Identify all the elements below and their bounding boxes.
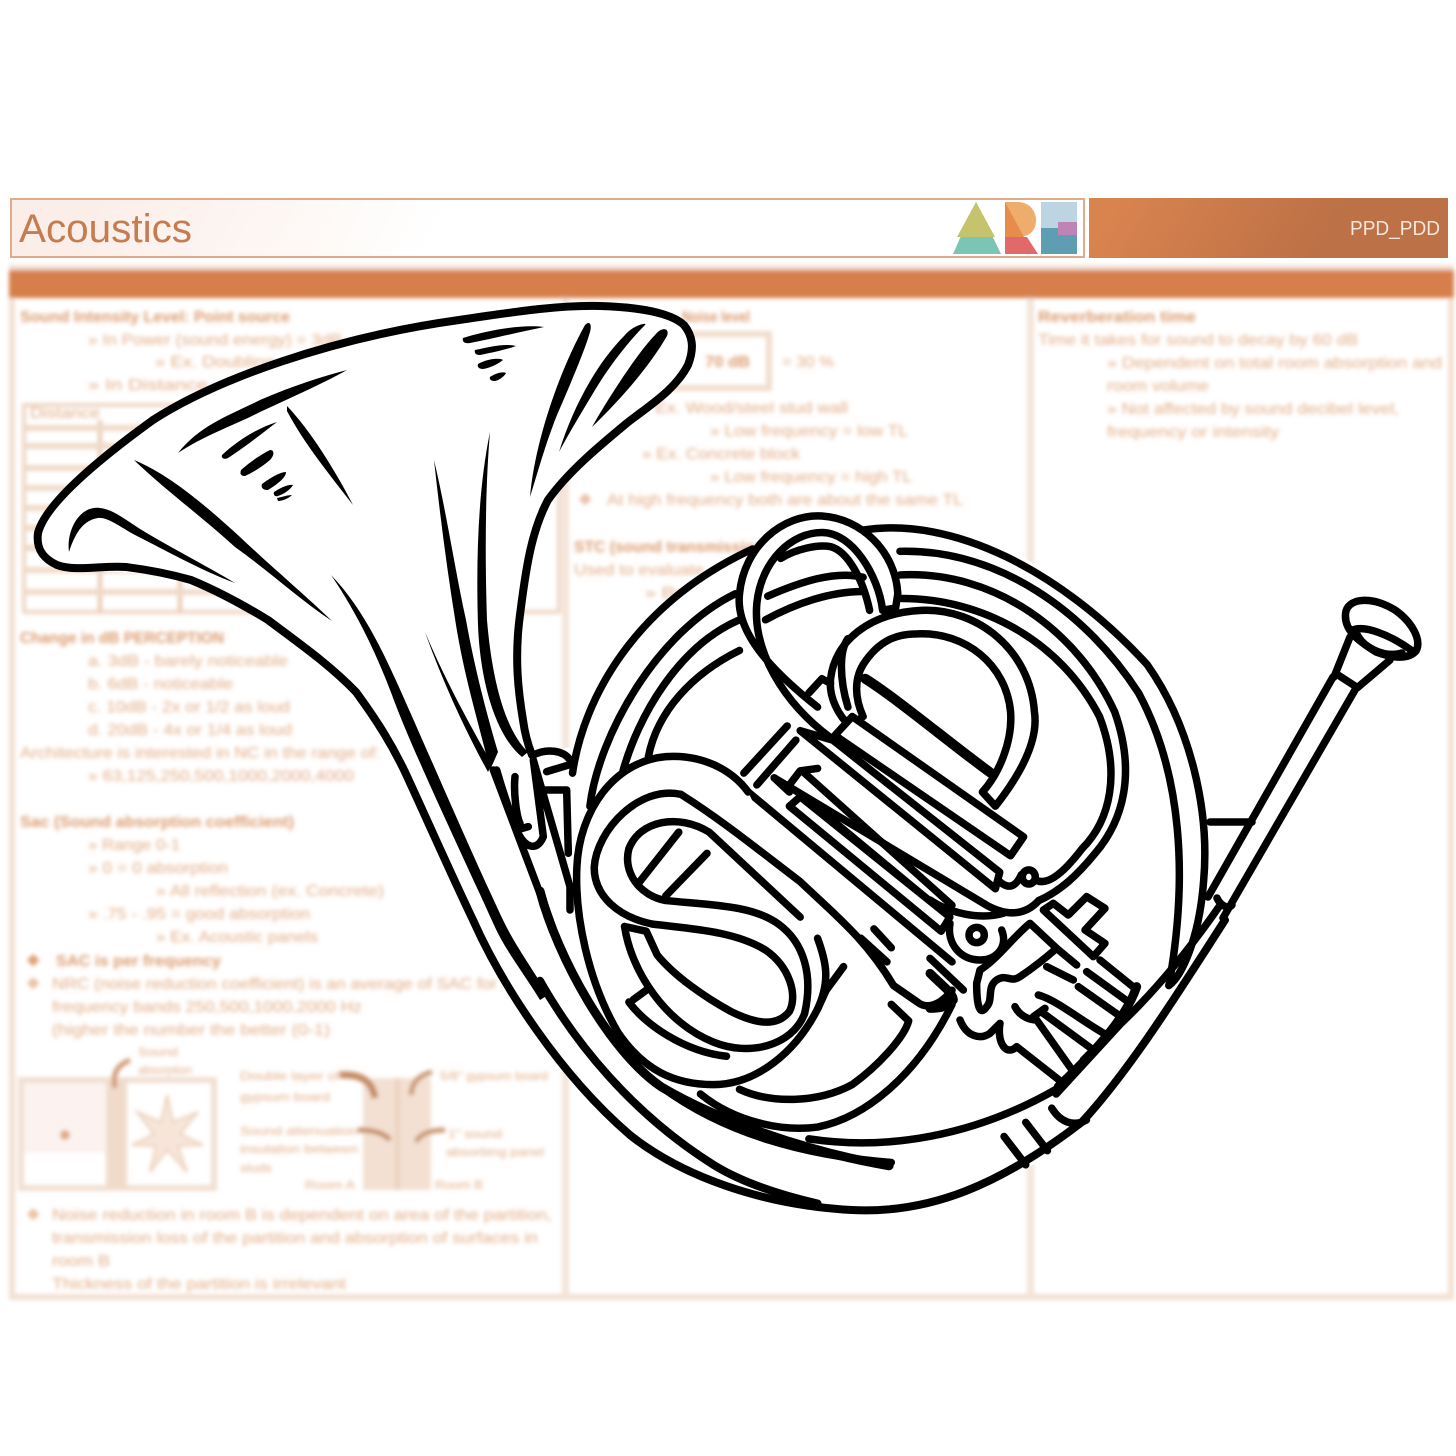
- orange header bar: [9, 270, 1454, 298]
- leadpipe and mouthpiece: [1208, 600, 1418, 918]
- diagram: partition section: 1" sound: [448, 1127, 502, 1141]
- left column footnote: transmission loss of the partition and absorption of surfaces in: [52, 1230, 538, 1247]
- right column notes: Reverberation time: [1038, 309, 1196, 326]
- middle column notes: Noise level: [682, 309, 750, 326]
- left column notes: » In Distance: [88, 377, 208, 394]
- right column notes: frequency or intensity: [1107, 424, 1279, 441]
- illustration: French horn: [38, 305, 1420, 1210]
- lower S-shaped loop: [577, 756, 826, 1085]
- left column notes: » All reflection (ex. Concrete): [156, 883, 384, 900]
- left column notes: » 0 = 0 absorption: [88, 860, 228, 877]
- left column notes: Sound Intensity Level: Point source: [20, 309, 290, 326]
- table: [24, 405, 559, 612]
- diagram: sound absorption room: absorption: [138, 1063, 192, 1077]
- top crook loop: [739, 516, 898, 738]
- middle column notes: » Ex. Concrete block: [642, 446, 801, 463]
- diagram: sound absorption room: Sound: [138, 1045, 178, 1059]
- middle column notes: STC (sound transmission: [574, 539, 764, 556]
- left column footnote: room B: [52, 1253, 110, 1270]
- outer and inner rings: [573, 528, 1205, 985]
- right column notes: room volume: [1107, 378, 1209, 395]
- D-shaped slide loop: [830, 610, 1035, 806]
- left column notes: (higher the number the better (0-1): [52, 1022, 330, 1039]
- left column notes: » Range 0-1: [88, 837, 180, 854]
- left column notes: » .75 - .95 = good absorption: [88, 906, 310, 923]
- left column notes: Sac (Sound absorption coefficient): [20, 814, 294, 831]
- middle column notes: ❖: [578, 492, 592, 509]
- right column notes: Time it takes for sound to decay by 60 dB: [1038, 332, 1358, 349]
- logo: ARE: [953, 202, 1077, 254]
- middle column notes: » Low frequency = low TL: [710, 423, 908, 440]
- middle column notes: [574, 309, 963, 602]
- code label: PPD_PDD: [1350, 218, 1440, 240]
- middle column notes: » Low frequency = high TL: [710, 469, 912, 486]
- left column notes: [20, 309, 559, 1039]
- diagram: sound absorption room: [21, 1045, 214, 1188]
- diagram: partition section: absorbing panel: [446, 1145, 544, 1159]
- diagram: partition section: Sound attenuation: [240, 1124, 358, 1138]
- leadpipe lower run: [1056, 905, 1220, 1094]
- left column notes: d. 20dB - 4x or 1/4 as loud: [88, 722, 292, 739]
- diagram: partition section: Room A: [305, 1178, 355, 1192]
- diagram: partition section: insulation between: [240, 1142, 358, 1156]
- code banner: [1089, 198, 1448, 258]
- sheet frame: [12, 268, 1451, 1297]
- left column notes: ❖: [26, 976, 40, 993]
- left column notes: » Ex. Doubling: [155, 354, 275, 371]
- left column notes: NRC (noise reduction coefficient) is an average of SAC for: [52, 976, 498, 993]
- horn brace and clasp: [493, 751, 573, 920]
- diagonal slides: [744, 679, 1039, 962]
- left column footnote: [26, 1207, 552, 1293]
- left column footnote: Noise reduction in room B is dependent on area of the partition,: [52, 1207, 552, 1224]
- left column notes: » 63,125,250,500,1000,2000,4000: [88, 768, 354, 785]
- diagram: partition section: Room B: [435, 1178, 483, 1192]
- middle column notes: At high frequency both are about the same TL: [607, 492, 963, 509]
- middle column notes: = 30 %: [782, 354, 834, 371]
- valve cluster: [930, 897, 1137, 1087]
- left column notes: frequency bands 250,500,1000,2000 Hz: [52, 999, 362, 1016]
- left column notes: » Ex. Acoustic panels: [156, 929, 318, 946]
- diagram: partition section: gypsum board: [240, 1090, 330, 1104]
- horn tubing and valves: [540, 516, 1220, 1204]
- horn bell outline: [38, 306, 1225, 1210]
- middle column notes: » By: [645, 585, 685, 602]
- blurred notes sheet: [9, 268, 1454, 1297]
- right column notes: » Dependent on total room absorption and: [1107, 355, 1442, 372]
- left column footnote: ❖: [26, 1207, 40, 1224]
- horn bell shading strokes: [69, 323, 668, 1000]
- title banner: [11, 199, 1084, 257]
- middle column notes: 70 dB: [705, 354, 750, 371]
- left column notes: » In Power (sound energy) = 3dB: [88, 332, 342, 349]
- middle column notes: Used to evaluate: [574, 562, 704, 579]
- title: Acoustics: [19, 207, 192, 251]
- left column notes: c. 10dB - 2x or 1/2 as loud: [88, 699, 290, 716]
- left column notes: Change in dB PERCEPTION: [20, 630, 224, 647]
- left column notes: a. 3dB - barely noticeable: [88, 653, 288, 670]
- diagram: partition section: studs: [240, 1161, 272, 1175]
- right column notes: [1038, 309, 1442, 441]
- table: Distance: [30, 405, 100, 422]
- right column notes: » Not affected by sound decibel level,: [1107, 401, 1399, 418]
- horn white silhouette: [38, 305, 1420, 1208]
- diagram: partition section: 5/8" gypsum board: [440, 1069, 548, 1083]
- left column notes: SAC is per frequency: [56, 953, 221, 970]
- middle column notes: Ex. Wood/steel stud wall: [655, 400, 848, 417]
- lower bell tubing: [540, 891, 1086, 1204]
- left column notes: Architecture is interested in NC in the range of:: [20, 745, 380, 762]
- diagram: partition section: [240, 1069, 548, 1192]
- left column notes: ❖: [26, 953, 40, 970]
- diagram: partition section: Double layer of: [240, 1069, 341, 1083]
- left column notes: b. 6dB - noticeable: [88, 676, 233, 693]
- left column footnote: Thickness of the partition is irrelevant: [52, 1276, 347, 1293]
